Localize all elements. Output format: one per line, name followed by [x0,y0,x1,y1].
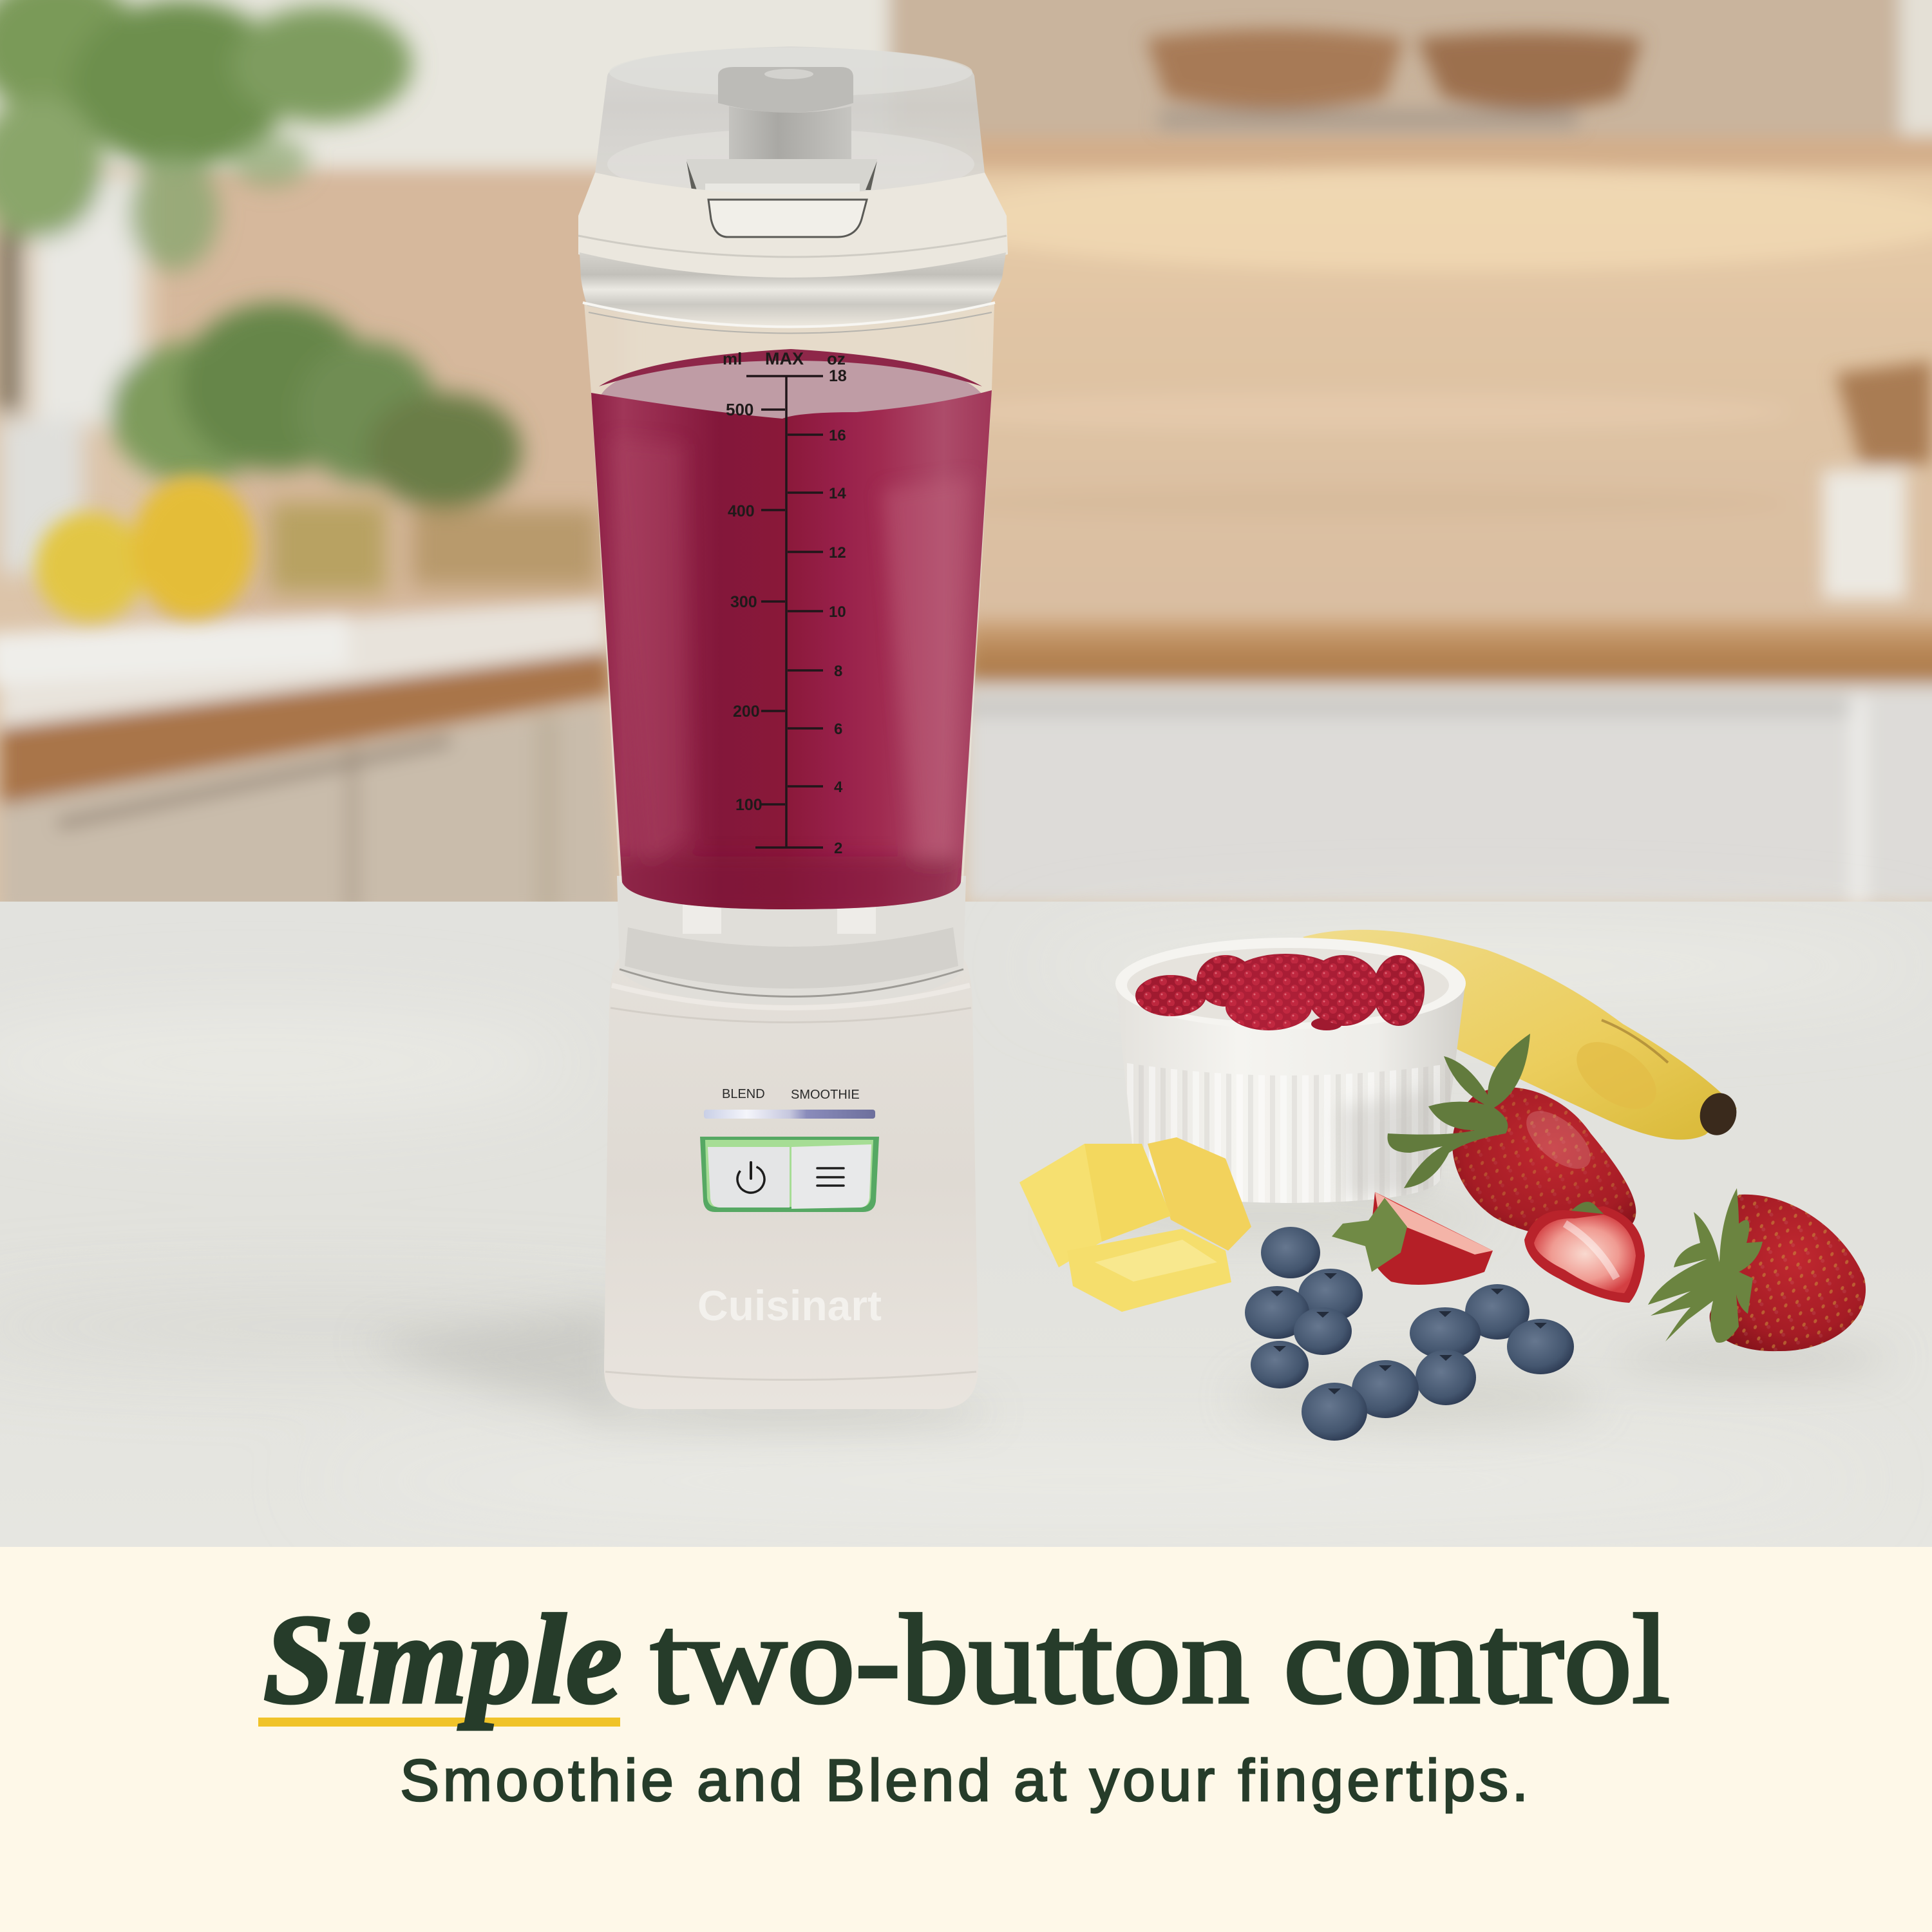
mode labels [722,1087,860,1102]
blueberries [1245,1227,1574,1441]
heading: Simple two-button control [263,1589,1670,1730]
power button [708,1147,790,1208]
measurement scale: 10 [829,603,846,621]
measurement scale: 8 [834,663,842,680]
heading: Simple two-button control: Simple [263,1589,622,1730]
yellow underline [258,1718,620,1727]
smoothie liquid [591,349,992,914]
measurement scale: 2 [834,840,842,857]
banana [1303,930,1741,1140]
control panel buttons [700,1137,879,1212]
blender base [604,956,978,1409]
pineapple chunks [1019,1137,1251,1312]
caption band [0,1547,1932,1932]
collar and threaded ring [578,173,1008,334]
fruit arrangement [1019,930,1866,1441]
measurement scale [723,349,847,857]
measurement scale: 16 [829,427,846,444]
raspberries [1135,954,1425,1030]
mode labels: BLEND [722,1087,765,1101]
plunger knob [718,67,853,169]
measurement scale: 300 [730,593,757,611]
measurement scale: 100 [735,796,762,814]
clear jar body [584,303,994,882]
lid with plunger [595,46,985,200]
halved strawberry [1524,1202,1645,1303]
measurement scale: 400 [728,502,755,520]
measurement scale: oz [827,349,846,368]
big strawberry [1387,1034,1636,1238]
marble counter top [0,902,1932,1547]
right strawberry [1648,1188,1866,1351]
blender product [578,46,1008,1409]
measurement scale: 500 [726,400,753,419]
heading: Simple two-button control: two-button control [650,1589,1670,1730]
mode indicator light bar [704,1110,875,1119]
mode labels: SMOOTHIE [791,1088,860,1102]
measurement scale: 6 [834,721,842,738]
measurement scale: 200 [733,703,760,721]
right strawberry leaves [1648,1188,1763,1343]
measurement scale: 12 [829,544,846,562]
jar bottom and blade hub [617,876,966,1005]
Cuisinart logo: Cuisinart [697,1282,882,1329]
lid latch [687,159,877,199]
wedge strawberry [1332,1192,1493,1285]
measurement scale: 14 [829,485,846,502]
measurement scale: 18 [829,367,847,385]
subheading: Smoothie and Blend at your fingertips. [400,1748,1528,1814]
ramekin with raspberries [1115,938,1466,1203]
measurement scale: MAX [765,349,804,368]
menu button [791,1144,871,1209]
measurement scale: ml [723,349,742,368]
blurred kitchen background [0,0,1932,914]
measurement scale: 4 [834,779,843,796]
big strawberry leaves [1387,1034,1530,1188]
